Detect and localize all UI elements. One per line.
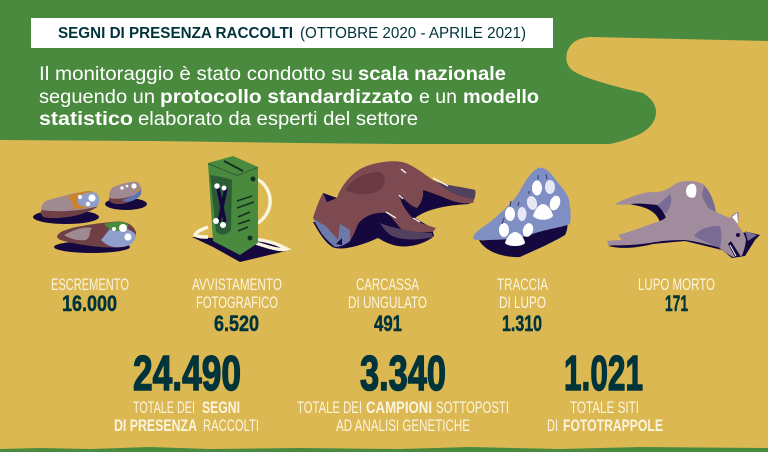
stat: fototrappole: DI bbox=[547, 416, 558, 435]
green header background bbox=[0, 0, 768, 144]
icon: camera trap bbox=[192, 156, 290, 262]
label: carcassa di ungulato: DI UNGULATO bbox=[348, 293, 427, 312]
label: escremento bbox=[51, 275, 129, 316]
stat: fototrappole: TOTALE SITI bbox=[570, 398, 639, 417]
icon: droppings bbox=[33, 182, 147, 253]
intro text: modello bbox=[463, 87, 539, 108]
icon: dead wolf bbox=[607, 181, 760, 258]
icon: ungulate carcass bbox=[313, 161, 475, 249]
upper paw bbox=[525, 174, 562, 220]
stat: fototrappole: FOTOTRAPPOLE bbox=[563, 416, 663, 435]
label: traccia di lupo: 1.310 bbox=[502, 311, 542, 336]
stat: segni di presenza bbox=[114, 347, 259, 435]
label: avvistamento fotografico: FOTOGRAFICO bbox=[196, 293, 278, 312]
stat: campioni: TOTALE DEI bbox=[297, 398, 362, 417]
label: lupo morto: 171 bbox=[665, 291, 688, 316]
label: traccia di lupo: DI LUPO bbox=[499, 293, 546, 312]
label: escremento: ESCREMENTO bbox=[51, 275, 129, 294]
intro text: e un bbox=[419, 87, 457, 108]
title bar: SEGNI DI PRESENZA RACCOLTI bbox=[58, 25, 293, 42]
stat: fototrappole: 1.021 bbox=[564, 347, 643, 401]
label: lupo morto: LUPO MORTO bbox=[638, 275, 715, 294]
stat: campioni: 3.340 bbox=[360, 347, 446, 401]
intro text: scala nazionale bbox=[358, 64, 506, 85]
intro text: statistico bbox=[39, 109, 133, 130]
intro text: protocollo standardizzato bbox=[160, 87, 413, 108]
stat: campioni: AD ANALISI GENETICHE bbox=[336, 416, 470, 435]
label: escremento: 16.000 bbox=[62, 291, 117, 316]
bottom green strip bbox=[0, 447, 768, 452]
stat: segni di presenza: DI PRESENZA bbox=[114, 416, 197, 435]
lower paw bbox=[499, 201, 535, 246]
label: carcassa di ungulato: 491 bbox=[374, 311, 402, 336]
intro text: Il monitoraggio è stato condotto su bbox=[39, 64, 353, 85]
intro text: elaborato da esperti del settore bbox=[138, 109, 418, 130]
stat: segni di presenza: 24.490 bbox=[133, 347, 241, 401]
label: lupo morto bbox=[638, 275, 715, 316]
stat: segni di presenza: RACCOLTI bbox=[203, 416, 259, 435]
label: carcassa di ungulato: CARCASSA bbox=[356, 275, 419, 294]
icon: wolf tracks bbox=[473, 168, 571, 257]
intro text bbox=[39, 64, 539, 130]
stat: segni di presenza: SEGNI bbox=[202, 398, 240, 417]
intro text: seguendo un bbox=[39, 87, 155, 108]
stat: segni di presenza: TOTALE DEI bbox=[133, 398, 195, 417]
label: avvistamento fotografico bbox=[192, 275, 282, 336]
label: traccia di lupo: TRACCIA bbox=[497, 275, 548, 294]
stat: campioni: CAMPIONI bbox=[366, 398, 432, 417]
label: avvistamento fotografico: 6.520 bbox=[214, 311, 259, 336]
stat: fototrappole bbox=[547, 347, 663, 435]
stat: campioni: SOTTOPOSTI bbox=[436, 398, 509, 417]
label: avvistamento fotografico: AVVISTAMENTO bbox=[192, 275, 282, 294]
label: traccia di lupo bbox=[497, 275, 548, 336]
title bar bbox=[31, 18, 553, 48]
title bar: (OTTOBRE 2020 - APRILE 2021) bbox=[300, 25, 526, 42]
label: carcassa di ungulato bbox=[348, 275, 427, 336]
stat: campioni bbox=[297, 347, 509, 435]
